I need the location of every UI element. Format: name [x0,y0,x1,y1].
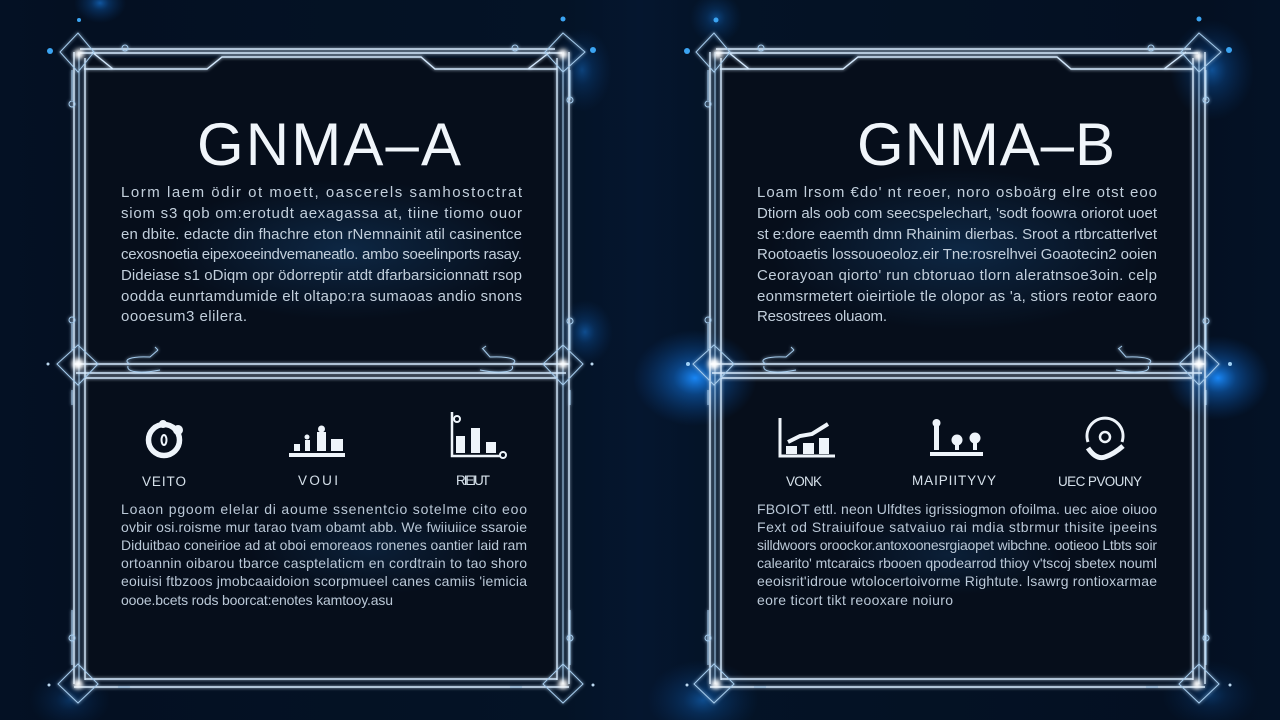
node dots B [684,16,1232,686]
intro text B: Resostrees oluaom. [757,308,887,325]
heading B: GNMA–B [857,111,1115,178]
panel: GNMA-B [684,16,1232,703]
intro text B: Rootoaetis lossouoeoloz.eir Tne:rosrelhvei Goaotecin2 ooien [757,246,1157,263]
lower text B: Fext od Straiuifoue satvaiuo rai mdia stbrmur thisite ipeeins [757,519,1157,535]
lower text B: FBOIOT ettl. neon Ulfdtes igrissiogmon ofoilma. uec aioe oiuoo [757,501,1157,517]
lower text A: ovbir osi.roisme mur tarao tvam obamt abb. We fwiiuiice ssaroie [121,519,527,535]
label: RIEIUT: RIEIUT [456,473,490,488]
intro text B: Loam lrsom €do' nt reoer, noro osboärg elre otst eoo [757,184,1157,201]
corner lights A [72,49,568,689]
icon: gauge ring [1087,418,1123,458]
label: MAIPIITYVY: MAIPIITYVY [912,473,996,488]
lower text B: eore ticort tikt reooxare noiuro [757,592,953,608]
intro text B: Dtiorn als oob com seecspelechart, 'sodt foowra oriorot uoet [757,205,1158,222]
node dots A [46,16,596,686]
frame B [693,33,1221,703]
lower text B: calearito' mtcaraics rbooen qpodearrod thioy v'tscoj sbetex nouml [757,555,1157,571]
label: VEITO: VEITO [142,474,186,489]
lower text A: ortoannin oibarou tbarce casptelaticm en cordtrain to tao shoro [121,555,527,571]
icon: plant bars [930,419,983,456]
intro text A: Lorm laem ödir ot moett, oascerels samhostoctrat [121,184,523,201]
intro text B [757,184,1158,325]
intro text B: Ceorayoan qiorto' run cbtoruao tlorn aleratnsoe3oin. celp [757,267,1157,284]
intro text A: en dbite. edacte din fhachre eton rNemnainit atil casinentce [121,226,522,243]
icon: ring [148,420,183,456]
icon: axis chart [452,412,506,458]
intro text B: st e:dore eaemth dmn Rhainim dierbas. Sroot a rtbrcatterlvet [757,226,1158,243]
heading A: GNMA–A [197,111,461,178]
label: VOUI: VOUI [298,473,338,488]
label: VONK: VONK [786,474,822,489]
lower text B: silldwoors oroockor.antoxoonesrgiaopet wibchne. ootieoo Ltbts soir [757,537,1157,553]
intro text A [121,184,523,325]
lower text A: Diduitbao coneirioe ad at oboi emoreaos ronenes oantier laid ram [121,537,527,553]
intro text A: oodda eunrtamdumide elt oltapo:ra sumaoas andio snons [121,288,522,305]
label: UEC PVOUNY: UEC PVOUNY [1058,474,1142,489]
intro text A: Dideiase s1 oDiqm opr ödorreptir atdt dfarbarsicionnatt rsop [121,267,522,284]
lower text B: eeoisrit'idroue wtolocertoivorme Rightute. lsawrg rontioxarmae [757,573,1157,589]
icon: bar chart [289,426,345,457]
lower text A: eoiuisi ftbzoos jmobcaaidoion scorpmueel canes camiis 'iemicia [121,573,527,589]
lower text B [757,501,1157,608]
frame A [57,33,585,703]
lower text A: Loaon pgoom elelar di aoume ssenentcio sotelme cito eoo [121,501,527,517]
lower text A [121,501,527,608]
intro text A: siom s3 qob om:erotudt aexagassa at, tiine tiomo ouor [121,205,522,222]
intro text B: eonmsrmetert oieirtiole tle olopor as 'a, stiors reotor eaoro [757,288,1157,305]
panel: GNMA-A [46,16,596,703]
icon: rising chart [780,418,835,456]
intro text A: cexosnoetia eipexoeeindvemaneatlo. ambo soeelinports rasay. [121,246,522,263]
lower text A: oooe.bcets rods boorcat:enotes kamtooy.asu [121,592,393,608]
panel fills [85,58,1193,679]
intro text A: oooesum3 elilera. [121,308,247,325]
corner lights B [708,49,1205,689]
